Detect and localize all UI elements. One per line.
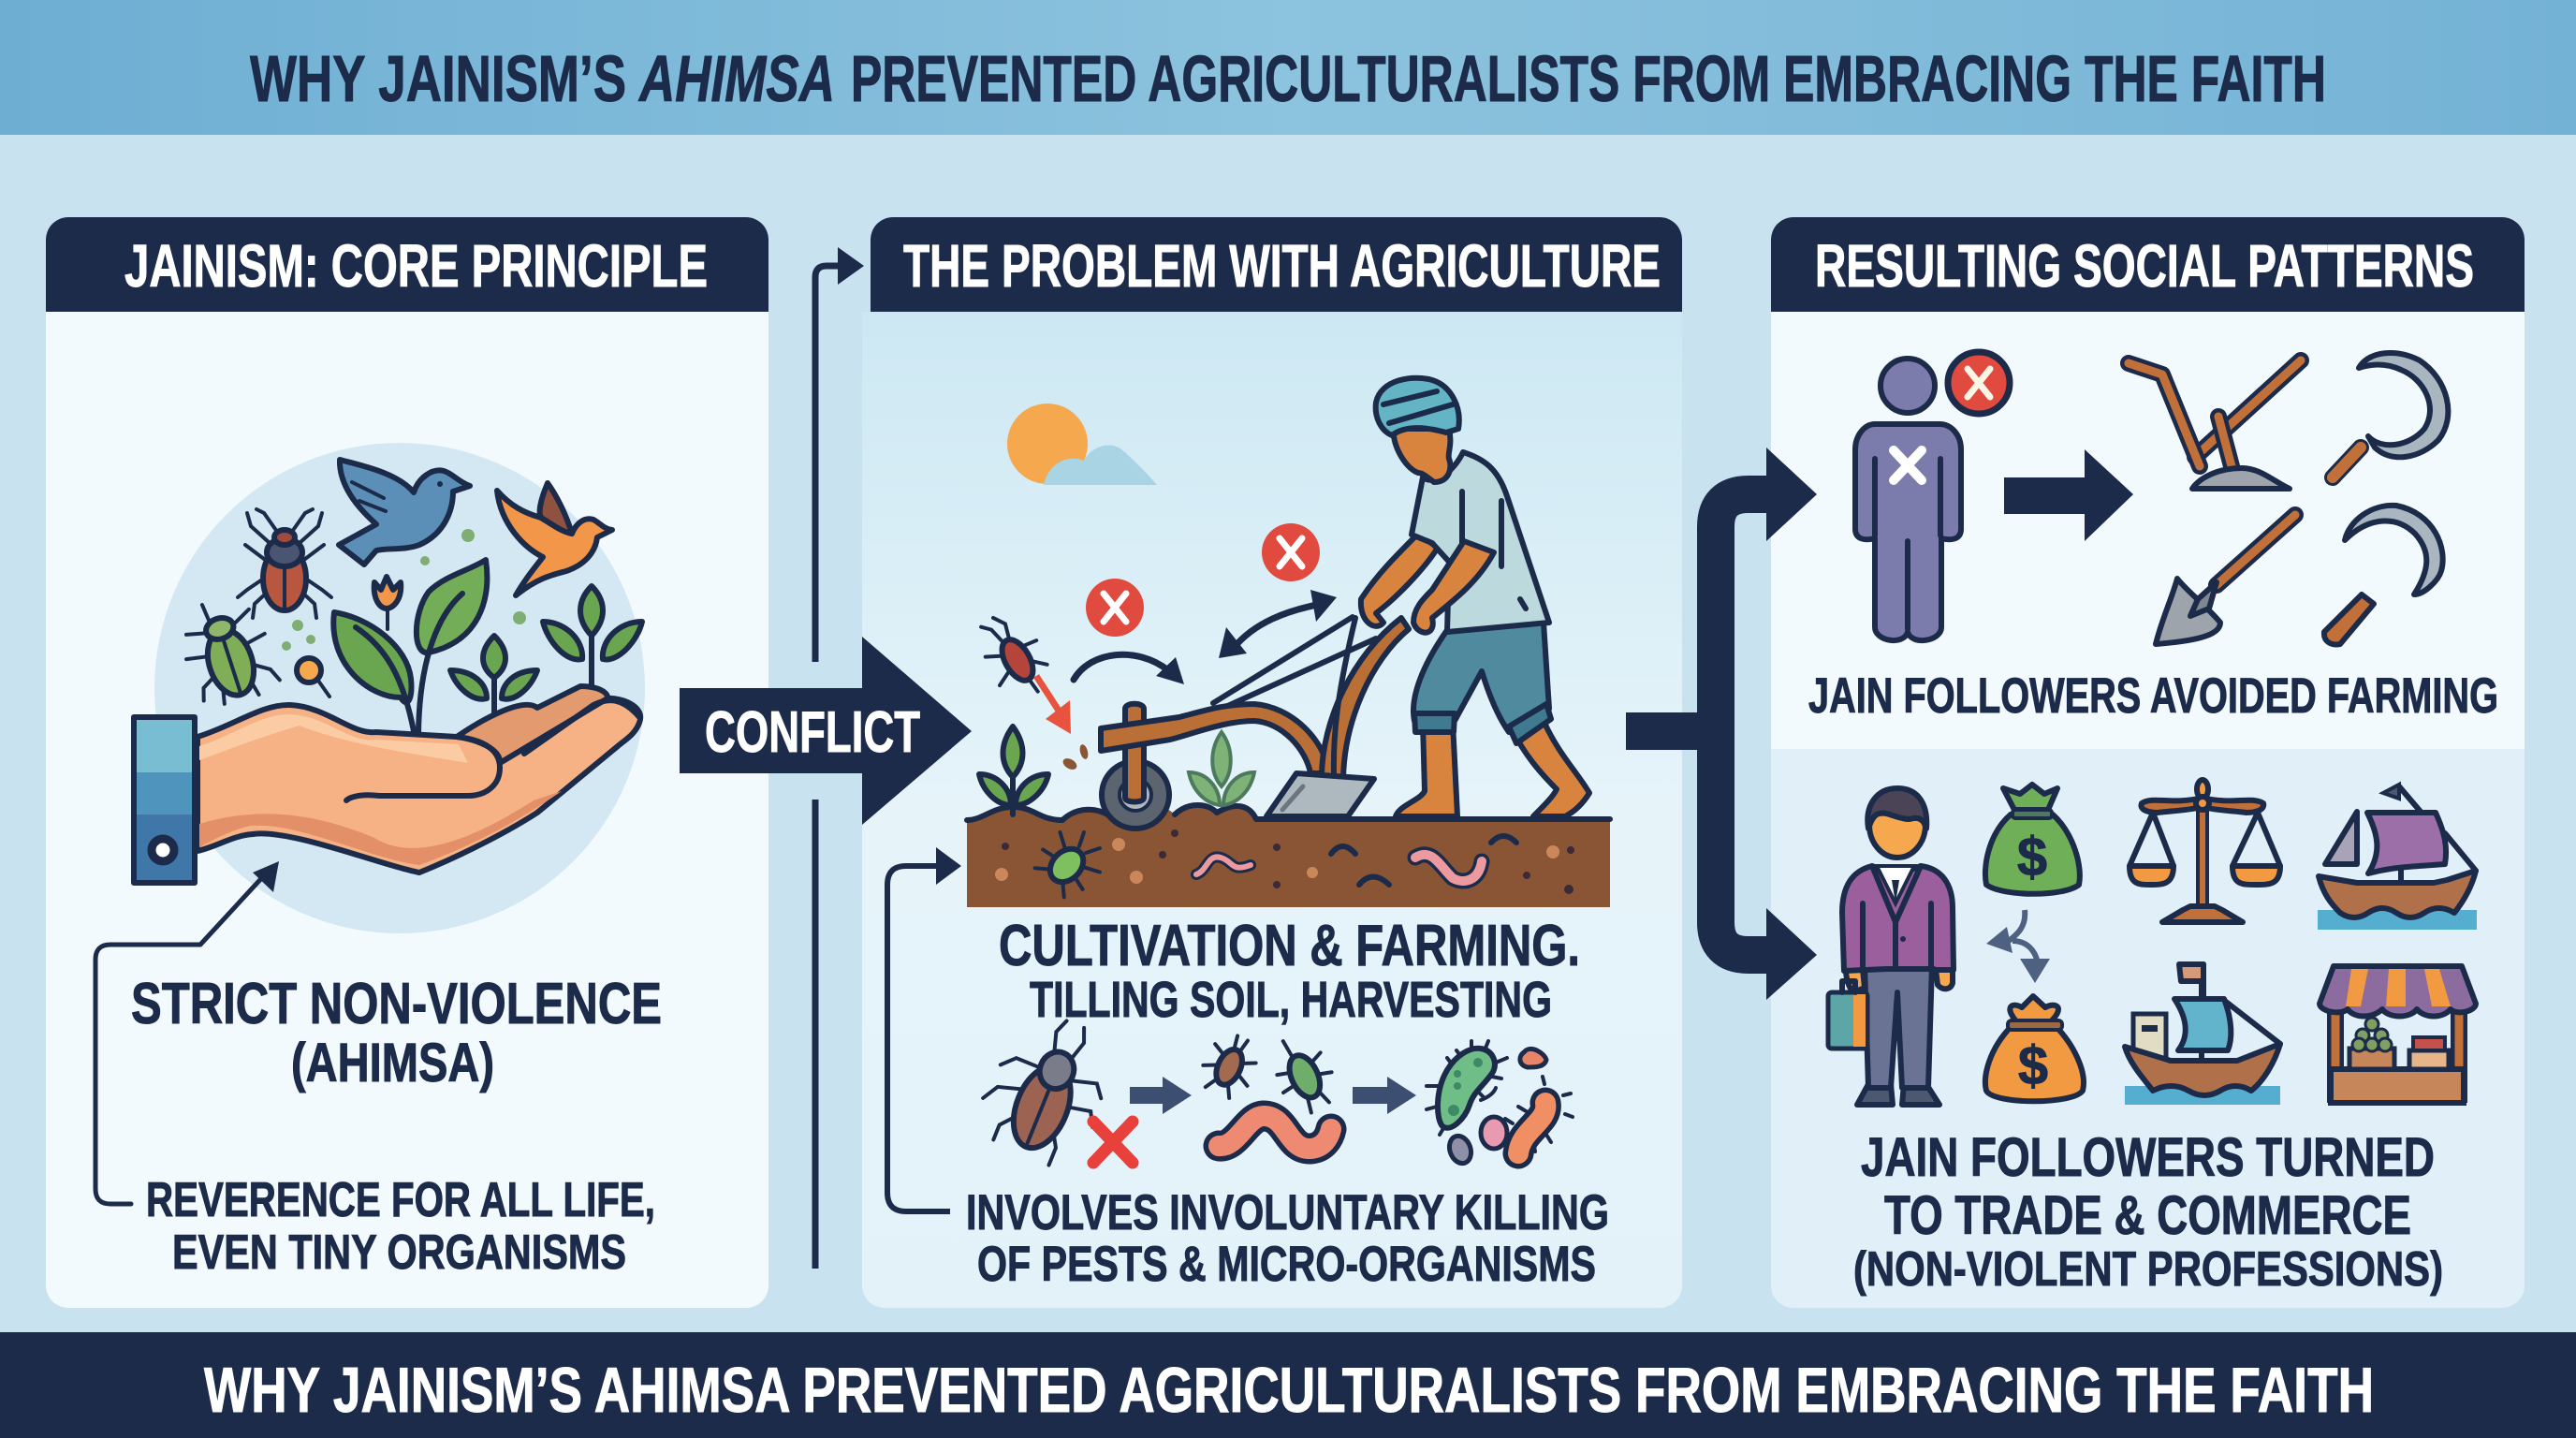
text: turned to trade: JAIN FOLLOWERS TURNED	[1861, 1127, 2435, 1188]
arrow: red arrow to soil	[1036, 676, 1090, 771]
icon: plough tool	[2129, 360, 2301, 489]
text: cultivation and farming	[999, 914, 1580, 1028]
icon: orange money bag: $	[2018, 1035, 2048, 1096]
icon: red cross circle one	[1086, 579, 1144, 637]
icon: seedlings	[979, 726, 1254, 814]
icon: sickle two	[2324, 506, 2443, 644]
icon: sun and cloud	[1007, 404, 1157, 485]
illustration: farmer ploughing	[967, 378, 1610, 907]
text: strict non-violence	[131, 972, 662, 1093]
text: involuntary killing: OF PESTS & MICRO-ORGANISMS	[977, 1237, 1596, 1292]
text: reverence for all life	[146, 1173, 655, 1280]
text: turned to trade: (NON-VIOLENT PROFESSIONS)	[1853, 1242, 2443, 1297]
arrow: two-way motion	[1219, 590, 1337, 658]
icon: small worm	[1196, 857, 1251, 874]
arrow: person to tools	[2004, 449, 2133, 541]
arrow: conflict connector line	[815, 247, 864, 1269]
text: turned to trade	[1853, 1127, 2443, 1297]
icon: small flower	[374, 577, 401, 629]
text: reverence for all life: REVERENCE FOR ALL LIFE,	[146, 1173, 655, 1227]
icon: shovel	[2156, 515, 2295, 644]
microbe blobs	[1446, 1049, 1546, 1167]
icon: open hand with cuff	[134, 686, 640, 883]
arrows: exchange	[1986, 910, 2050, 983]
spore dots	[282, 529, 526, 651]
icon: plough	[1101, 617, 1409, 829]
icon: orange bird	[497, 483, 612, 595]
arrow: beetle to bugs	[1130, 1077, 1192, 1114]
diagram: pests to micro-organisms	[969, 1003, 1573, 1175]
title banner: WHY JAINISM’S	[250, 42, 626, 115]
text: strict non-violence: (AHIMSA)	[291, 1033, 494, 1093]
icon: sickle one	[2333, 353, 2448, 477]
icon: blue bird	[339, 460, 470, 565]
panel: Jainism core principle	[46, 217, 768, 1308]
text: cultivation and farming: CULTIVATION & FARMING.	[999, 914, 1580, 978]
title banner	[0, 0, 2576, 135]
arrow: branching outcome	[1626, 448, 1817, 1000]
panel heading: resulting social patterns	[1771, 217, 2525, 312]
icon: balance scales	[2130, 780, 2280, 922]
icon: person with cross	[1855, 352, 2010, 640]
icon: merchant	[1828, 788, 1954, 1105]
icon: market stall	[2320, 966, 2476, 1103]
panel heading: problem with agriculture	[871, 217, 1682, 312]
text: turned to trade: TO TRADE & COMMERCE	[1884, 1185, 2411, 1246]
icon: merchant ship blue	[2125, 964, 2280, 1105]
text: involuntary killing	[966, 1185, 1609, 1292]
icon: worm	[1219, 1116, 1331, 1149]
icon: small brown bug	[1195, 1028, 1265, 1103]
arrow: callout from hand	[95, 861, 279, 1204]
icon: falling red insect	[969, 605, 1059, 707]
illustration: life in the palm	[134, 443, 645, 933]
icon: large worm	[1415, 855, 1482, 881]
arrow: conflict	[680, 637, 972, 825]
icon: red cross circle two	[1262, 523, 1320, 581]
title banner: AHIMSA	[637, 42, 835, 115]
icon: green bacterium	[1427, 1041, 1507, 1135]
icon: green beetle	[172, 589, 282, 712]
text: involuntary killing: INVOLVES INVOLUNTARY KILLING	[966, 1185, 1609, 1240]
icon: plants	[333, 560, 642, 734]
icon: orange money bag	[1985, 996, 2084, 1101]
icon: small green bug	[1264, 1028, 1343, 1120]
panel: resulting social patterns	[1771, 217, 2525, 1308]
arrow: side path into soil	[887, 847, 961, 1211]
icon: orange bacterium	[1505, 1077, 1573, 1153]
icon: soil beetle	[1030, 820, 1112, 902]
footer banner	[0, 1332, 2576, 1438]
icon: red beetle	[238, 509, 331, 618]
text: cultivation and farming: TILLING SOIL, HARVESTING	[1030, 972, 1552, 1028]
soil	[967, 802, 1610, 907]
icon: green money bag: $	[2017, 827, 2047, 888]
arrow: curved into plough	[1074, 654, 1184, 684]
panel heading: core principle: JAINISM: CORE PRINCIPLE	[124, 232, 708, 300]
icon: green money bag	[1985, 785, 2080, 894]
arrow: conflict: CONFLICT	[705, 700, 920, 765]
icon: large beetle with cross	[969, 1003, 1133, 1175]
panel heading: problem with agriculture: THE PROBLEM WITH AGRICULTURE	[903, 232, 1661, 300]
icon: magnifying seed	[297, 658, 329, 697]
text: strict non-violence: STRICT NON-VIOLENCE	[131, 972, 662, 1036]
panel: the problem with agriculture	[862, 217, 1682, 1308]
arrow: bugs to microbes	[1353, 1077, 1416, 1114]
icon: sailing ship purple	[2318, 785, 2477, 930]
panel heading: core principle	[46, 217, 768, 312]
icon: farmer	[1361, 378, 1589, 816]
text: reverence for all life: EVEN TINY ORGANISMS	[172, 1225, 626, 1280]
